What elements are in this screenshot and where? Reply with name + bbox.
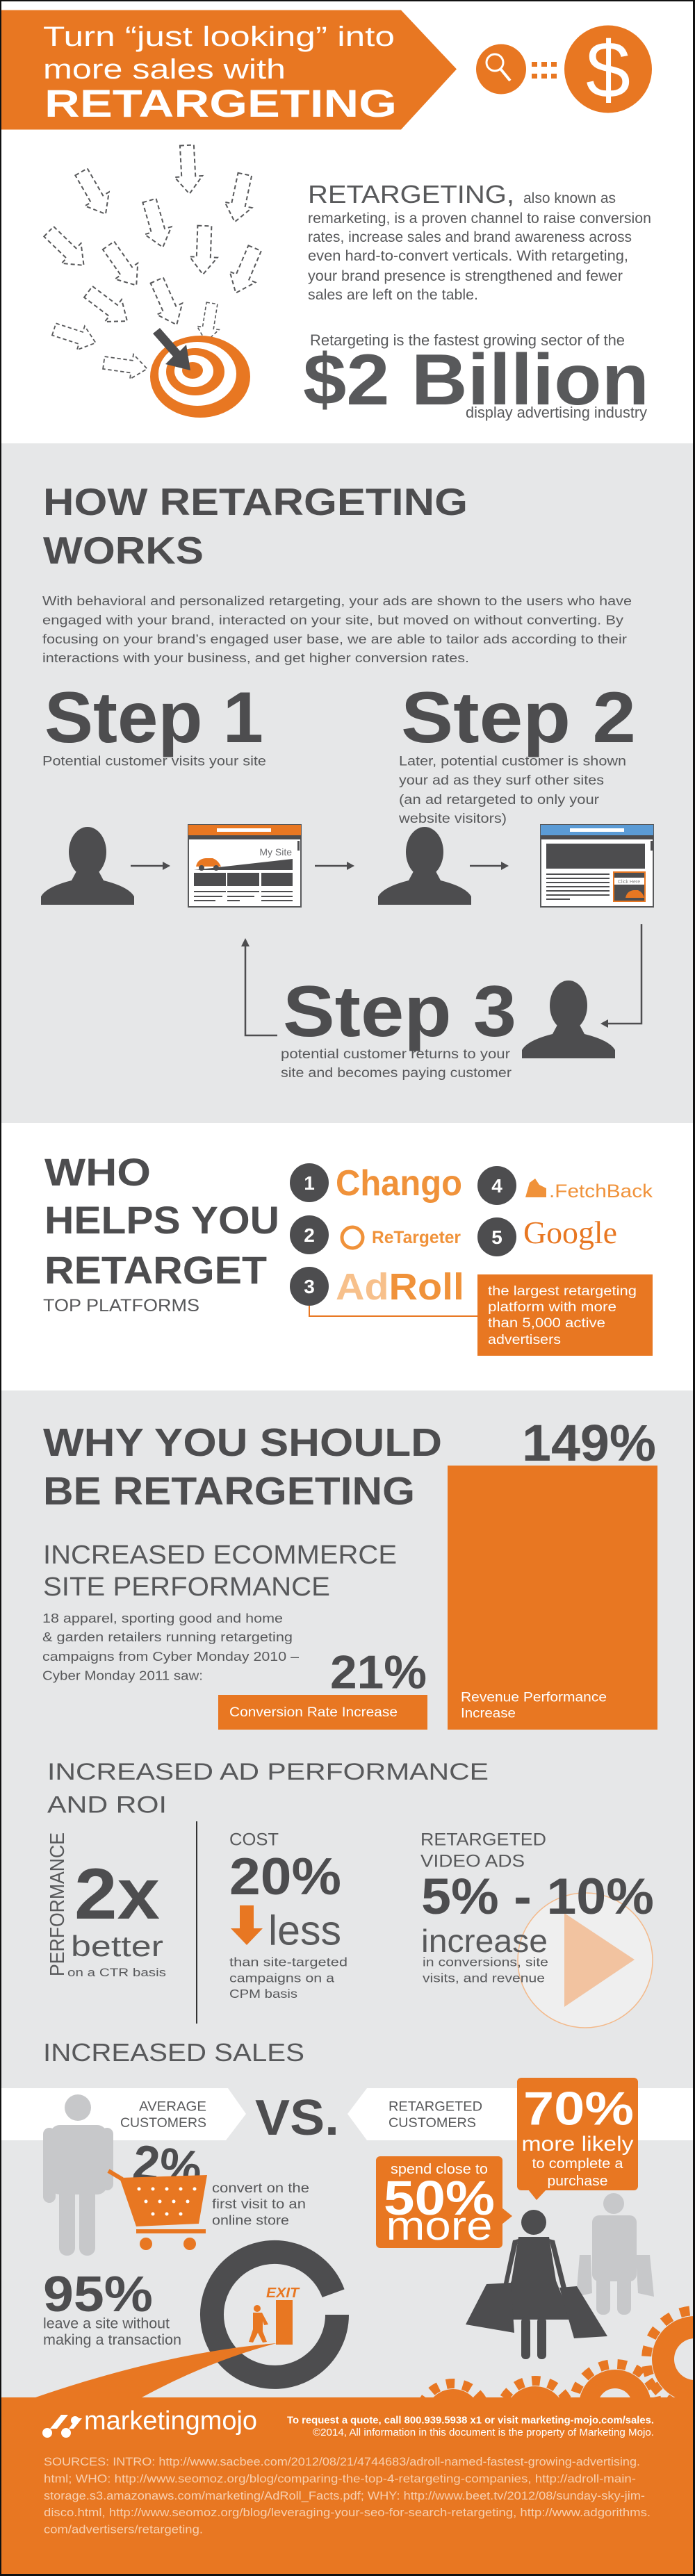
- title banner: [0, 10, 457, 129]
- heading: how retargeting works: [43, 480, 468, 572]
- step 1: Step 1: [44, 678, 263, 758]
- step 2: your ad as they surf other sites: [399, 773, 604, 788]
- arrow 3: [470, 862, 509, 870]
- platform list: 3: [304, 1276, 315, 1297]
- bar chart: conversion rate 21%: 21%: [330, 1646, 427, 1698]
- intro text: your brand presence is strengthened and fewer: [308, 268, 623, 284]
- icon: person 3: [522, 981, 615, 1058]
- arrow: step 3 back to site: [241, 938, 277, 1035]
- stat: cost 20% less: CPM basis: [229, 1987, 297, 2001]
- icon: magnifier to dollar: $: [586, 26, 630, 115]
- logo: retargeter: ReTargeter: [372, 1228, 461, 1247]
- icon: person 1: [41, 827, 134, 905]
- vs band: CUSTOMERS: [120, 2116, 206, 2131]
- callout: spend 50% more: spend close to: [391, 2162, 488, 2177]
- browser: retargeted ad: [541, 825, 653, 907]
- callout: adroll: [309, 1274, 653, 1356]
- text: 2% convert: first visit to an: [212, 2197, 306, 2212]
- bar chart: conversion rate 21%: [218, 1646, 427, 1730]
- text: 2% convert: online store: [212, 2214, 289, 2228]
- sources: SOURCES: INTRO: http://www.sacbee.com/2012/08/21/4744683/adroll-named-fastest-growing-advertising.: [44, 2456, 640, 2468]
- subheading: increased sales: INCREASED SALES: [43, 2038, 304, 2067]
- footer: [0, 2397, 695, 2576]
- browser: my site: [188, 825, 301, 907]
- callout: adroll: than 5,000 active: [488, 1316, 605, 1331]
- intro text: remarketing, is a proven channel to raise conversion: [308, 211, 651, 227]
- icon: retargeted shoppers: [466, 2193, 654, 2359]
- heading: why you should be retargeting: BE RETARGETING: [43, 1469, 415, 1513]
- text: 2% convert: [212, 2181, 309, 2228]
- contact text: To request a quote, call 800.939.5938 x1 or visit marketing-mojo.com/sales.: [287, 2414, 654, 2427]
- stat: $2 billion: Retargeting is the fastest growing sector of the: [310, 331, 625, 349]
- step 3: site and becomes paying customer: [281, 1066, 512, 1081]
- sources: com/advertisers/retargeting.: [44, 2524, 203, 2536]
- bar chart: revenue performance 149%: 149%: [522, 1414, 656, 1472]
- sources: disco.html, http://www.seomoz.org/blog/leveraging-your-seo-for-search-retargeting, http://www.adgorithms.: [44, 2507, 651, 2519]
- logo: fetchback: [525, 1179, 653, 1201]
- subheading: ecommerce performance: 18 apparel, sporting good and home: [42, 1611, 283, 1625]
- arrow 1: [131, 862, 170, 870]
- logo: adroll: AdRoll: [336, 1266, 464, 1308]
- subheading: ecommerce performance: INCREASED ECOMMERCE: [43, 1541, 397, 1570]
- stat: performance 2x: 2x: [74, 1854, 160, 1935]
- stat: performance 2x: on a CTR basis: [67, 1966, 166, 1979]
- bar chart: revenue performance 149%: [448, 1414, 657, 1730]
- stat: cost 20% less: than site-targeted: [229, 1955, 348, 1969]
- icon: play button: [518, 1893, 653, 2028]
- heading: who helps you retarget: [43, 1150, 279, 1315]
- callout: 70% more likely: purchase: [548, 2174, 607, 2189]
- vs band: VS.: [255, 2090, 339, 2146]
- browser: my site: My Site: [259, 846, 292, 858]
- intro text: even hard-to-convert verticals. With retargeting,: [308, 248, 628, 264]
- bar chart: revenue performance 149%: Revenue Performance: [461, 1690, 607, 1705]
- contact text: [287, 2414, 654, 2438]
- stat: retargeted video ads: RETARGETED: [420, 1830, 546, 1850]
- subheading: ad performance and roi: INCREASED AD PERFORMANCE: [47, 1759, 489, 1785]
- stat: 95% leave: [43, 2267, 181, 2348]
- intro text: sales are left on the table.: [308, 287, 478, 303]
- step 2: Step 2: [401, 678, 636, 758]
- logo: retargeter: [342, 1227, 461, 1248]
- logo: marketingmojo: marketingmojo: [84, 2406, 257, 2436]
- vs band: AVERAGE: [139, 2100, 206, 2115]
- how it works paragraph: With behavioral and personalized retargeting, your ads are shown to the users who have: [42, 593, 632, 608]
- platform list: [290, 1163, 653, 1356]
- callout: adroll: advertisers: [488, 1333, 561, 1347]
- contact text: ©2014, All information in this document is the property of Marketing Mojo.: [313, 2427, 654, 2438]
- step 3: potential customer returns to your: [281, 1047, 511, 1062]
- bar chart: revenue performance 149%: Increase: [461, 1707, 516, 1721]
- stat: performance 2x: [47, 1832, 166, 1979]
- heading: why you should be retargeting: [43, 1420, 442, 1513]
- callout: adroll: the largest retargeting: [488, 1284, 637, 1299]
- bar chart: conversion rate 21%: Conversion Rate Increase: [229, 1705, 398, 1720]
- how it works paragraph: interactions with your business, and get higher conversion rates.: [42, 650, 469, 665]
- sources: html; WHO: http://www.seomoz.org/blog/comparing-the-top-4-retargeting-companies, http://adroll-main-: [44, 2472, 636, 2485]
- platform list: 5: [491, 1227, 502, 1248]
- stat: 95% leave: making a transaction: [43, 2332, 181, 2348]
- sources: [44, 2456, 651, 2536]
- step 2: Later, potential customer is shown: [399, 755, 626, 769]
- sources: storage.s3.amazonaws.com/marketing/AdRoll_Facts.pdf; WHY: http://www.beet.tv/2012/08/sunday-sky-jim-: [44, 2490, 645, 2502]
- icon: average customer with cart: [43, 2094, 207, 2256]
- stat: 95% leave: 95%: [43, 2267, 153, 2322]
- icon: magnifier to dollar: [476, 25, 652, 115]
- decoration: gears: [420, 2311, 695, 2453]
- stat: cost 20% less: 20%: [229, 1847, 341, 1905]
- title banner: Turn “just looking” into: [43, 22, 395, 52]
- platform list: 2: [304, 1224, 315, 1246]
- intro text: also known as: [523, 190, 616, 206]
- stat: cost 20% less: COST: [229, 1830, 279, 1850]
- subheading: ecommerce performance: campaigns from Cyber Monday 2010 –: [42, 1650, 299, 1664]
- step 3: Step 3: [283, 971, 516, 1052]
- logo: google: Google: [523, 1215, 617, 1250]
- stat: retargeted video ads: visits, and revenue: [423, 1971, 545, 1985]
- arrow 2: [315, 862, 354, 870]
- callout: 70% more likely: [517, 2078, 638, 2200]
- heading: who helps you retarget: WHO: [44, 1150, 151, 1194]
- icon: exit ring: EXIT: [266, 2286, 300, 2301]
- intro text: rates, increase sales and brand awareness across: [308, 229, 632, 245]
- title banner: RETARGETING: [44, 81, 397, 125]
- stat: 95% leave: leave a site without: [43, 2316, 170, 2332]
- callout: adroll: platform with more: [488, 1300, 616, 1315]
- stat: performance 2x: PERFORMANCE: [47, 1832, 69, 1976]
- logo: fetchback: .FetchBack: [549, 1181, 653, 1201]
- title banner: more sales with: [43, 54, 286, 85]
- stat: $2 billion: $2 Billion: [303, 340, 649, 420]
- step 2: (an ad retargeted to only your: [399, 793, 600, 807]
- stat: retargeted video ads: VIDEO ADS: [420, 1852, 525, 1871]
- heading: how retargeting works: HOW RETARGETING: [43, 480, 468, 523]
- platform list: 1: [304, 1172, 315, 1194]
- subheading: ecommerce performance: & garden retailers running retargeting: [42, 1630, 293, 1644]
- icon: average customer with cart: 2%: [130, 2135, 204, 2197]
- how it works paragraph: [42, 593, 632, 665]
- vs band: CUSTOMERS: [389, 2116, 476, 2131]
- stat: cost 20% less: [229, 1830, 348, 2001]
- stat: retargeted video ads: [420, 1830, 654, 2028]
- callout: spend 50% more: [376, 2156, 512, 2249]
- callout: 70% more likely: 70%: [523, 2083, 634, 2135]
- callout: spend 50% more: more: [386, 2204, 492, 2249]
- stat: cost 20% less: less: [268, 1907, 341, 1954]
- callout: 70% more likely: to complete a: [532, 2156, 623, 2172]
- illustration: dashed arrows hitting target: [39, 145, 268, 418]
- callout: spend 50% more: 50%: [384, 2171, 495, 2225]
- heading: who helps you retarget: TOP PLATFORMS: [43, 1296, 199, 1315]
- stat: $2 billion: display advertising industry: [466, 404, 647, 421]
- subheading: ecommerce performance: SITE PERFORMANCE: [43, 1573, 330, 1602]
- text: 2% convert: convert on the: [212, 2181, 309, 2196]
- heading: who helps you retarget: HELPS YOU: [44, 1198, 279, 1242]
- step 2: website visitors): [398, 812, 507, 826]
- stat: retargeted video ads: 5% - 10%: [421, 1869, 654, 1925]
- intro text: RETARGETING,: [308, 180, 514, 208]
- how it works paragraph: engaged with your brand, interacted on your site, but moved on without converting. By: [42, 613, 624, 627]
- platform list: 4: [491, 1175, 502, 1197]
- callout: 70% more likely: more likely: [521, 2133, 634, 2156]
- heading: why you should be retargeting: WHY YOU SHOULD: [43, 1420, 442, 1465]
- browser: retargeted ad: Click Here: [618, 880, 640, 885]
- arrow: step 2 to step 3: [600, 924, 641, 1028]
- intro text: [308, 180, 651, 303]
- icon: down arrow: [231, 1905, 263, 1945]
- heading: how retargeting works: WORKS: [43, 529, 204, 572]
- icon: exit ring: [35, 2252, 337, 2397]
- vs band: RETARGETED: [389, 2100, 482, 2115]
- subheading: ecommerce performance: Cyber Monday 2011 saw:: [42, 1669, 203, 1683]
- subheading: ad performance and roi: [47, 1759, 489, 1819]
- vs band: [0, 2088, 695, 2146]
- how it works paragraph: focusing on your brand’s engaged user base, we are able to tailor ads according to their: [42, 632, 627, 646]
- stat: performance 2x: better: [71, 1930, 163, 1962]
- icon: person 2: [378, 827, 471, 905]
- logo: chango: Chango: [336, 1163, 462, 1204]
- stat: cost 20% less: campaigns on a: [229, 1971, 334, 1985]
- step 3: [281, 971, 516, 1081]
- stat: retargeted video ads: increase: [421, 1923, 548, 1959]
- step 2: [398, 678, 636, 826]
- subheading: ecommerce performance: [42, 1541, 397, 1683]
- subheading: ad performance and roi: AND ROI: [47, 1792, 167, 1819]
- step 1: Potential customer visits your site: [42, 755, 266, 769]
- heading: who helps you retarget: RETARGET: [44, 1248, 267, 1292]
- stat: retargeted video ads: in conversions, site: [423, 1955, 548, 1969]
